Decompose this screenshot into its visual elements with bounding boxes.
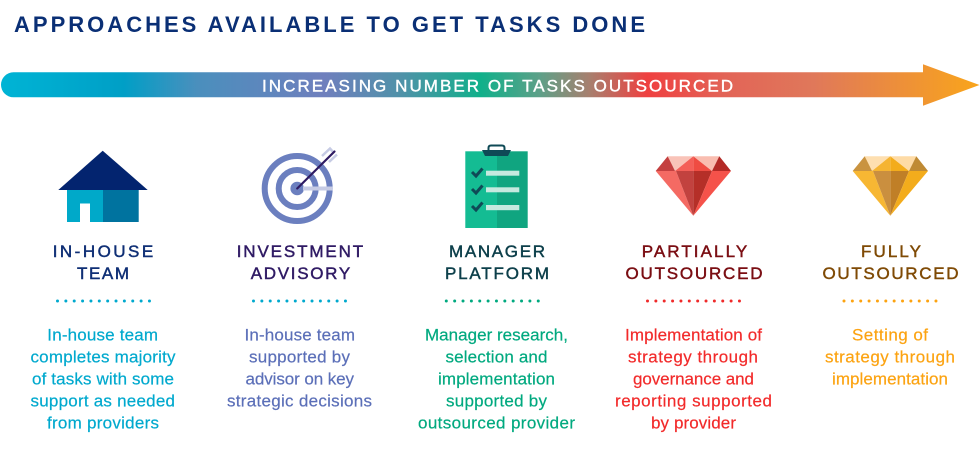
- heading: investment advisory: ADVISORY: [251, 264, 350, 283]
- description: partially outsourced: governance and: [633, 370, 754, 388]
- description: partially outsourced: reporting supported: [615, 392, 772, 410]
- heading: manager platform: MANAGER: [449, 242, 545, 261]
- description: partially outsourced: by provider: [651, 414, 736, 432]
- heading: in-house team: IN-HOUSE: [53, 242, 153, 261]
- icon: red diamond: [656, 156, 731, 216]
- description: manager platform: Manager research,: [425, 326, 568, 344]
- description: in-house team: In-house team: [47, 326, 158, 344]
- heading: fully outsourced: OUTSOURCED: [822, 264, 958, 283]
- heading: partially outsourced: OUTSOURCED: [626, 264, 762, 283]
- heading: fully outsourced: FULLY: [861, 242, 921, 261]
- description: partially outsourced: Implementation of: [625, 326, 762, 344]
- description: partially outsourced: [615, 326, 772, 432]
- heading: partially outsourced: [626, 242, 762, 283]
- description: investment advisory: advisor on key: [246, 370, 354, 388]
- heading: in-house team: [53, 242, 153, 283]
- description: investment advisory: strategic decisions: [227, 392, 372, 410]
- description: manager platform: selection and: [446, 348, 548, 366]
- heading: investment advisory: INVESTMENT: [237, 242, 363, 261]
- column: partially outsourced: [615, 156, 772, 433]
- description: investment advisory: [227, 326, 372, 410]
- heading: manager platform: [445, 242, 549, 283]
- heading: investment advisory: [237, 242, 363, 283]
- description: fully outsourced: [825, 326, 955, 388]
- description: partially outsourced: strategy through: [628, 348, 758, 366]
- description: manager platform: supported by: [446, 392, 548, 410]
- column: fully outsourced: [822, 156, 958, 388]
- heading: in-house team: TEAM: [77, 264, 129, 283]
- description: in-house team: [30, 326, 176, 432]
- heading: manager platform: PLATFORM: [445, 264, 549, 283]
- arrow: increasing number of tasks outsourced: [1, 64, 979, 106]
- description: in-house team: of tasks with some: [32, 370, 174, 388]
- icon: house: [58, 151, 148, 222]
- icon: target with arrow: [265, 148, 337, 221]
- description: manager platform: [418, 326, 575, 432]
- description: in-house team: from providers: [47, 414, 159, 432]
- description: fully outsourced: strategy through: [825, 348, 955, 366]
- icon: clipboard checklist: [465, 146, 528, 228]
- description: in-house team: support as needed: [30, 392, 175, 410]
- icon: gold diamond: [853, 156, 928, 216]
- description: manager platform: outsourced provider: [418, 414, 575, 432]
- description: investment advisory: In-house team: [244, 326, 355, 344]
- arrow: increasing number of tasks outsourced: INCREASING NUMBER OF TASKS OUTSOURCED: [262, 76, 733, 96]
- column: in-house team: [30, 151, 176, 432]
- description: fully outsourced: implementation: [832, 370, 948, 388]
- column: investment advisory: [227, 148, 372, 410]
- description: in-house team: completes majority: [30, 348, 176, 366]
- description: manager platform: implementation: [438, 370, 555, 388]
- column: manager platform: [418, 146, 575, 432]
- description: investment advisory: supported by: [249, 348, 350, 366]
- heading: fully outsourced: [822, 242, 958, 283]
- title: APPROACHES AVAILABLE TO GET TASKS DONE: [14, 12, 645, 37]
- description: fully outsourced: Setting of: [852, 326, 928, 344]
- heading: partially outsourced: PARTIALLY: [642, 242, 747, 261]
